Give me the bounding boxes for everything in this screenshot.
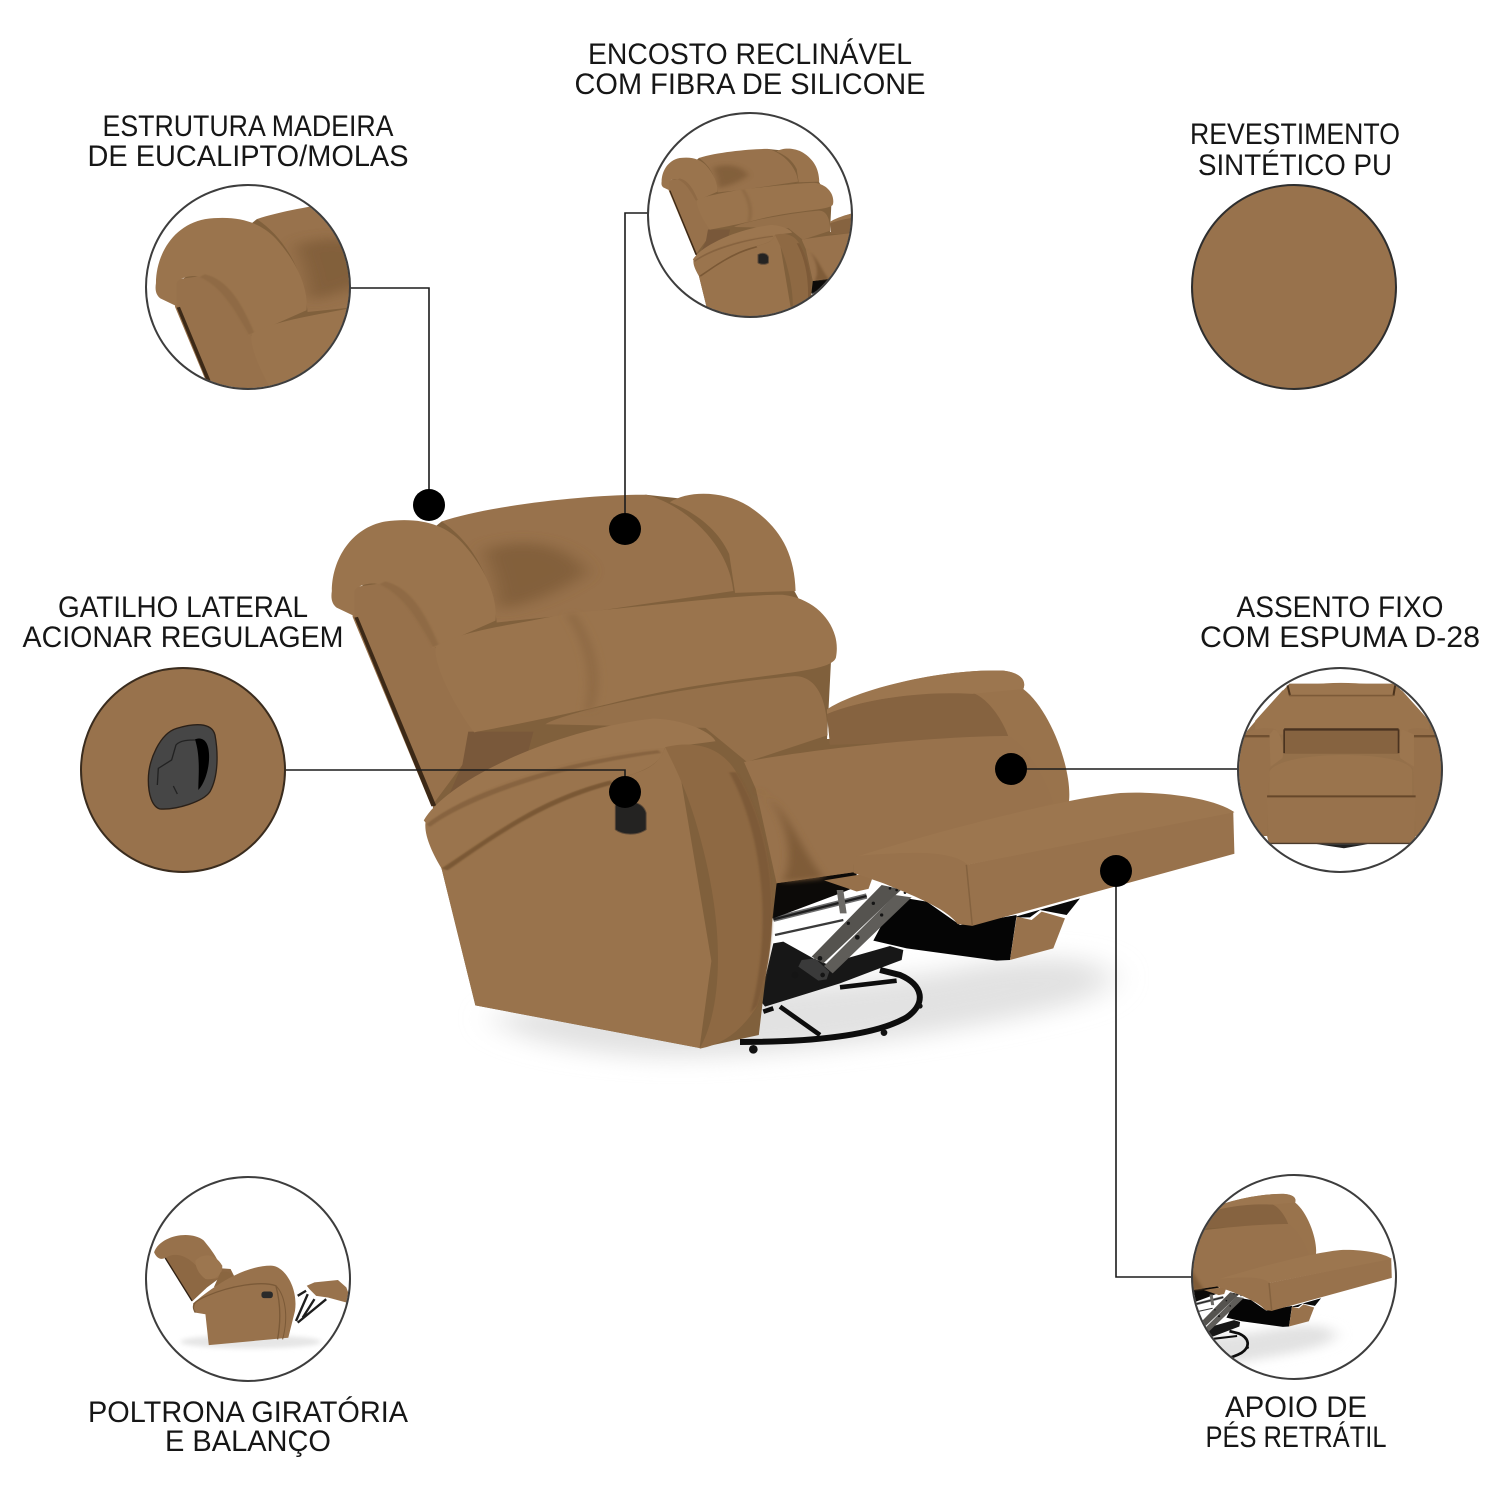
marker dots (413, 489, 1132, 887)
heading: apoio de pés (1206, 1391, 1386, 1454)
heading: assento fixo: COM ESPUMA D-28 (1200, 621, 1480, 654)
heading: assento fixo (1200, 591, 1480, 654)
circle: side trigger (81, 668, 285, 872)
heading: estrutura: ESTRUTURA MADEIRA (102, 110, 394, 143)
heading: encosto reclinável: ENCOSTO RECLINÁVEL (588, 38, 912, 71)
circle: swivel side view (146, 1177, 351, 1381)
circle: backrest detail (647, 112, 853, 318)
heading: apoio de pés: PÉS RETRÁTIL (1206, 1421, 1386, 1454)
connector lines (285, 213, 1238, 1277)
heading: encosto reclinável (574, 38, 926, 101)
icon: trigger handle (148, 725, 217, 809)
heading: encosto reclinável: COM FIBRA DE SILICONE (574, 68, 926, 101)
circle: footrest detail (1191, 1174, 1397, 1380)
heading: poltrona giratória (88, 1396, 408, 1458)
heading: apoio de pés: APOIO DE (1225, 1391, 1367, 1424)
heading: gatilho lateral: GATILHO LATERAL (58, 591, 308, 624)
heading: estrutura (88, 110, 408, 173)
heading: estrutura: DE EUCALIPTO/MOLAS (88, 140, 408, 173)
heading: revestimento (1190, 118, 1400, 182)
circle: seat front view (1238, 668, 1448, 872)
heading: gatilho lateral (22, 591, 344, 654)
circle: structure detail (145, 184, 351, 390)
heading: revestimento: REVESTIMENTO (1190, 118, 1400, 151)
heading: assento fixo: ASSENTO FIXO (1236, 591, 1444, 624)
main chair photo (331, 494, 1234, 1057)
heading: poltrona giratória: POLTRONA GIRATÓRIA (88, 1396, 408, 1429)
heading: poltrona giratória: E BALANÇO (165, 1425, 331, 1458)
heading: revestimento: SINTÉTICO PU (1198, 149, 1392, 182)
circle: PU upholstery swatch (1192, 185, 1396, 389)
heading: gatilho lateral: ACIONAR REGULAGEM (22, 621, 344, 654)
